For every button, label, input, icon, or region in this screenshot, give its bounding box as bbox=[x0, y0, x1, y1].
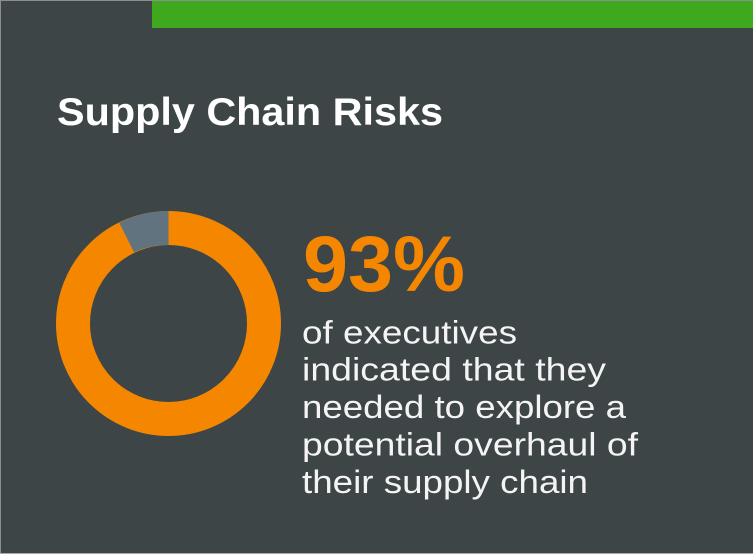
description text: of executives bbox=[302, 314, 517, 350]
description text bbox=[302, 314, 638, 500]
description text: needed to explore a bbox=[302, 389, 626, 425]
description text: indicated that they bbox=[302, 352, 606, 388]
description text: potential overhaul of bbox=[302, 426, 638, 462]
description text: their supply chain bbox=[302, 464, 588, 500]
donut segment: 93 percent orange bbox=[73, 228, 264, 419]
big statistic: 93%: 93% bbox=[303, 219, 465, 308]
title: Supply Chain Risks bbox=[57, 91, 443, 134]
green accent bar bbox=[152, 1, 753, 28]
donut segment: remaining 7 percent grey bbox=[119, 211, 168, 252]
donut chart: 93 percent bbox=[73, 211, 264, 419]
